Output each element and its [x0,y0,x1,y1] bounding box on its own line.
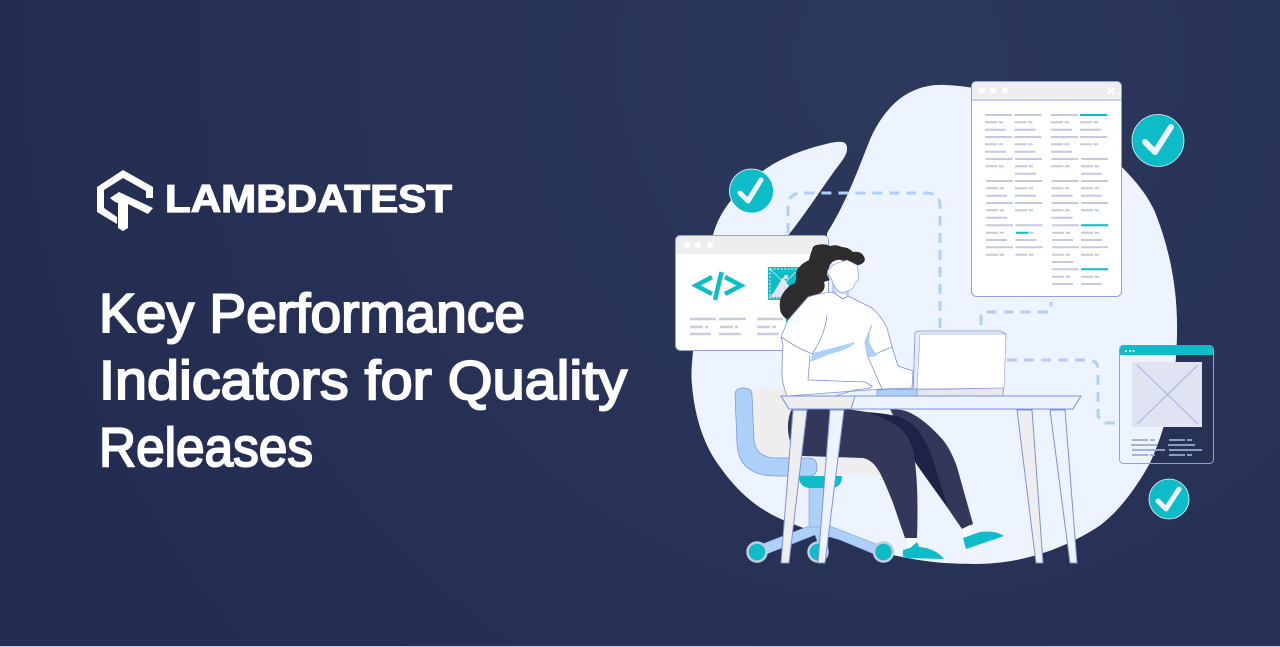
icon: LambdaTest hexagon mark [97,170,153,231]
window frame [676,236,828,350]
text lines [690,319,783,334]
sleeve right [865,325,892,357]
chair seat underside [799,476,842,488]
logo [97,170,452,231]
near leg [788,409,918,538]
chair back and seat [748,388,882,476]
hair [780,244,865,320]
title bar [676,236,828,254]
card frame [1120,346,1214,464]
code icon [696,272,741,300]
close icon [1108,88,1114,94]
sleeve left [781,315,827,354]
window frame [972,82,1122,296]
laptop [877,331,1006,396]
background blob [691,85,1177,564]
bottom edge [0,646,1280,647]
laptop keyboard [917,388,1003,396]
highlighted rows [1016,115,1108,269]
table rows [985,115,1108,284]
desk top [781,396,1081,409]
window dots [979,88,1008,94]
far leg [890,409,973,529]
face [827,260,858,292]
title: Key Performance [99,282,525,344]
person [780,244,1004,559]
chair [735,388,893,562]
title: Releases [99,416,313,478]
far shoe [963,532,1004,549]
laptop back [913,331,1006,396]
torso [781,292,913,396]
laptop base [877,389,917,396]
desk [781,396,1081,563]
image placeholder [1132,362,1202,427]
neck [833,283,848,299]
arm [808,355,882,396]
shirt shadow [810,325,877,362]
title bar [972,82,1121,99]
check badge: top right [1132,114,1184,166]
check badge: left [730,169,774,213]
card header [1120,345,1213,355]
chair base [757,526,884,557]
chair arm [735,388,817,476]
check badge: bottom right [1149,479,1189,519]
caption lines [1131,440,1202,455]
code window [676,236,828,350]
image card window [1120,345,1214,464]
wheels [748,542,893,562]
title [99,282,628,478]
title: Indicators for Quality [99,349,628,411]
socks [907,525,972,548]
desk legs [781,410,807,563]
far leg shadow [867,412,948,508]
wordmark: LAMBDATEST [165,178,452,221]
dashed connectors [788,193,1120,423]
collar [833,292,848,299]
window dots [684,242,713,248]
table window [972,82,1122,296]
laptop screen [917,334,1006,389]
header dots [1125,350,1134,352]
near shoe [903,542,944,559]
image icon [768,267,800,322]
chair post [809,486,830,527]
